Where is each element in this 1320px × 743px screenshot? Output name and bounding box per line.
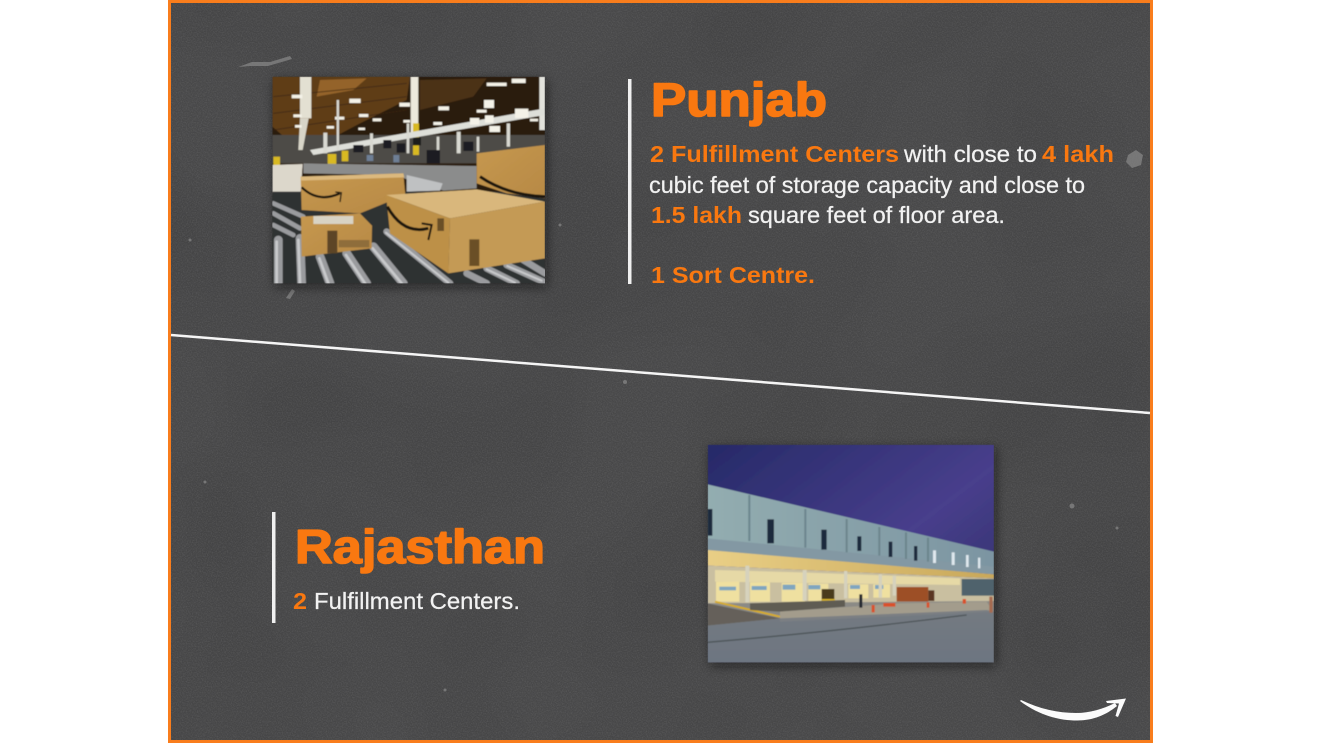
panel background xyxy=(170,2,1152,742)
infographic canvas xyxy=(168,0,1153,743)
photo: fulfillment center building at dusk xyxy=(708,445,996,666)
text block: Punjab details: 4 lakh xyxy=(1042,141,1114,167)
text block: Punjab details: 1.5 lakh xyxy=(651,202,742,228)
text block: Punjab details: cubic feet of storage capacity and close to xyxy=(649,172,1085,198)
photo: warehouse conveyor with Amazon boxes xyxy=(272,77,547,287)
heading: Rajasthan: Rajasthan xyxy=(295,520,545,573)
Rajasthan accent bar xyxy=(272,512,276,623)
text block: Punjab details: 1 Sort Centre. xyxy=(651,262,815,288)
text block: Punjab details: 2 Fulfillment Centers xyxy=(650,141,899,167)
text block: Rajasthan details: Fulfillment Centers. xyxy=(314,588,520,614)
Punjab accent bar xyxy=(628,79,632,284)
text block: Punjab details: with close to xyxy=(903,141,1037,167)
divider line xyxy=(171,335,1150,413)
heading: Punjab: Punjab xyxy=(651,73,827,126)
text block: Punjab details xyxy=(649,141,1114,288)
text block: Punjab details: square feet of floor area. xyxy=(748,202,1005,228)
text block: Rajasthan details: 2 xyxy=(293,588,307,614)
icon: Amazon smile arrow xyxy=(1020,698,1126,720)
